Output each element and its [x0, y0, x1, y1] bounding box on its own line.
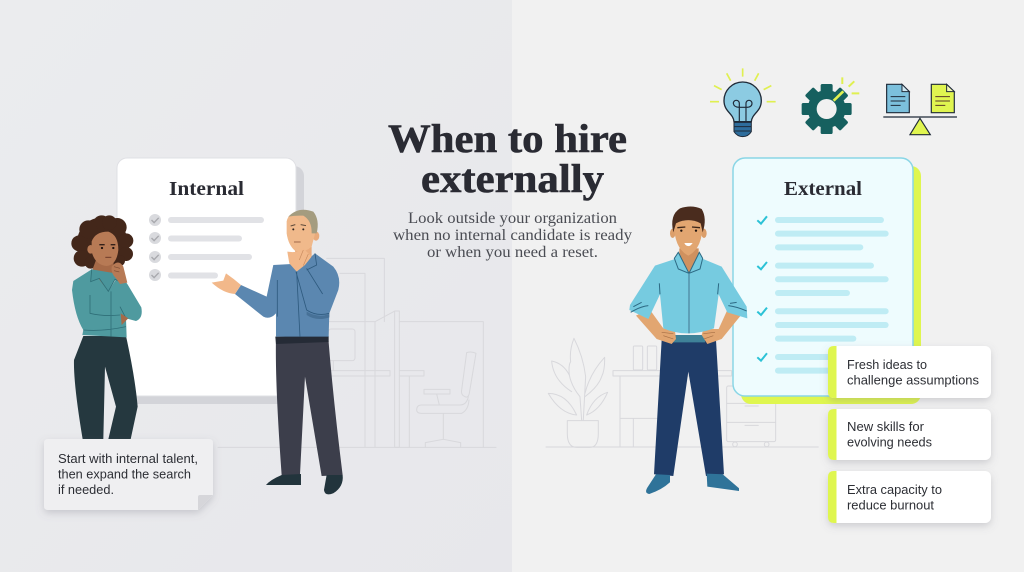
callout: new skills: evolving needs	[847, 434, 932, 450]
icon: gear	[802, 77, 859, 134]
background office illustration: left	[218, 258, 496, 447]
panel: internal card	[117, 158, 304, 404]
callout: new skills	[828, 409, 991, 460]
subtitle	[393, 210, 632, 261]
icon: balanced documents	[883, 84, 957, 135]
callout: extra capacity: Extra capacity to	[847, 482, 942, 497]
title: When to hire	[388, 116, 627, 161]
subtitle: or when you need a reset.	[427, 244, 598, 261]
figure: woman thinking	[71, 215, 142, 439]
background office illustration: plant	[548, 338, 608, 447]
subtitle: when no internal candidate is ready	[393, 227, 632, 244]
checklist: external	[757, 216, 889, 374]
callout: internal talent note	[44, 439, 213, 510]
callout: extra capacity	[828, 471, 991, 523]
background office illustration: right	[546, 346, 818, 447]
callout: new skills: New skills for	[847, 419, 925, 434]
heading: internal: Internal	[169, 178, 244, 200]
panel: external card	[733, 158, 921, 404]
icon: light bulb	[710, 68, 776, 137]
title	[388, 116, 627, 201]
figure: man gesturing	[212, 210, 343, 494]
callout: internal talent note: Start with internal talent,	[58, 451, 198, 466]
callout: fresh ideas: challenge assumptions	[847, 372, 979, 388]
figure: confident man	[629, 206, 747, 494]
checklist: internal	[149, 214, 264, 281]
callout: internal talent note: then expand the search	[58, 466, 191, 482]
callout: extra capacity: reduce burnout	[847, 498, 934, 512]
callout: internal talent note: if needed.	[58, 482, 114, 497]
subtitle: Look outside your organization	[408, 210, 617, 227]
title: externally	[421, 156, 604, 201]
callout: fresh ideas: Fresh ideas to	[847, 357, 927, 372]
callout: fresh ideas	[828, 346, 991, 398]
heading: external: External	[784, 178, 862, 200]
